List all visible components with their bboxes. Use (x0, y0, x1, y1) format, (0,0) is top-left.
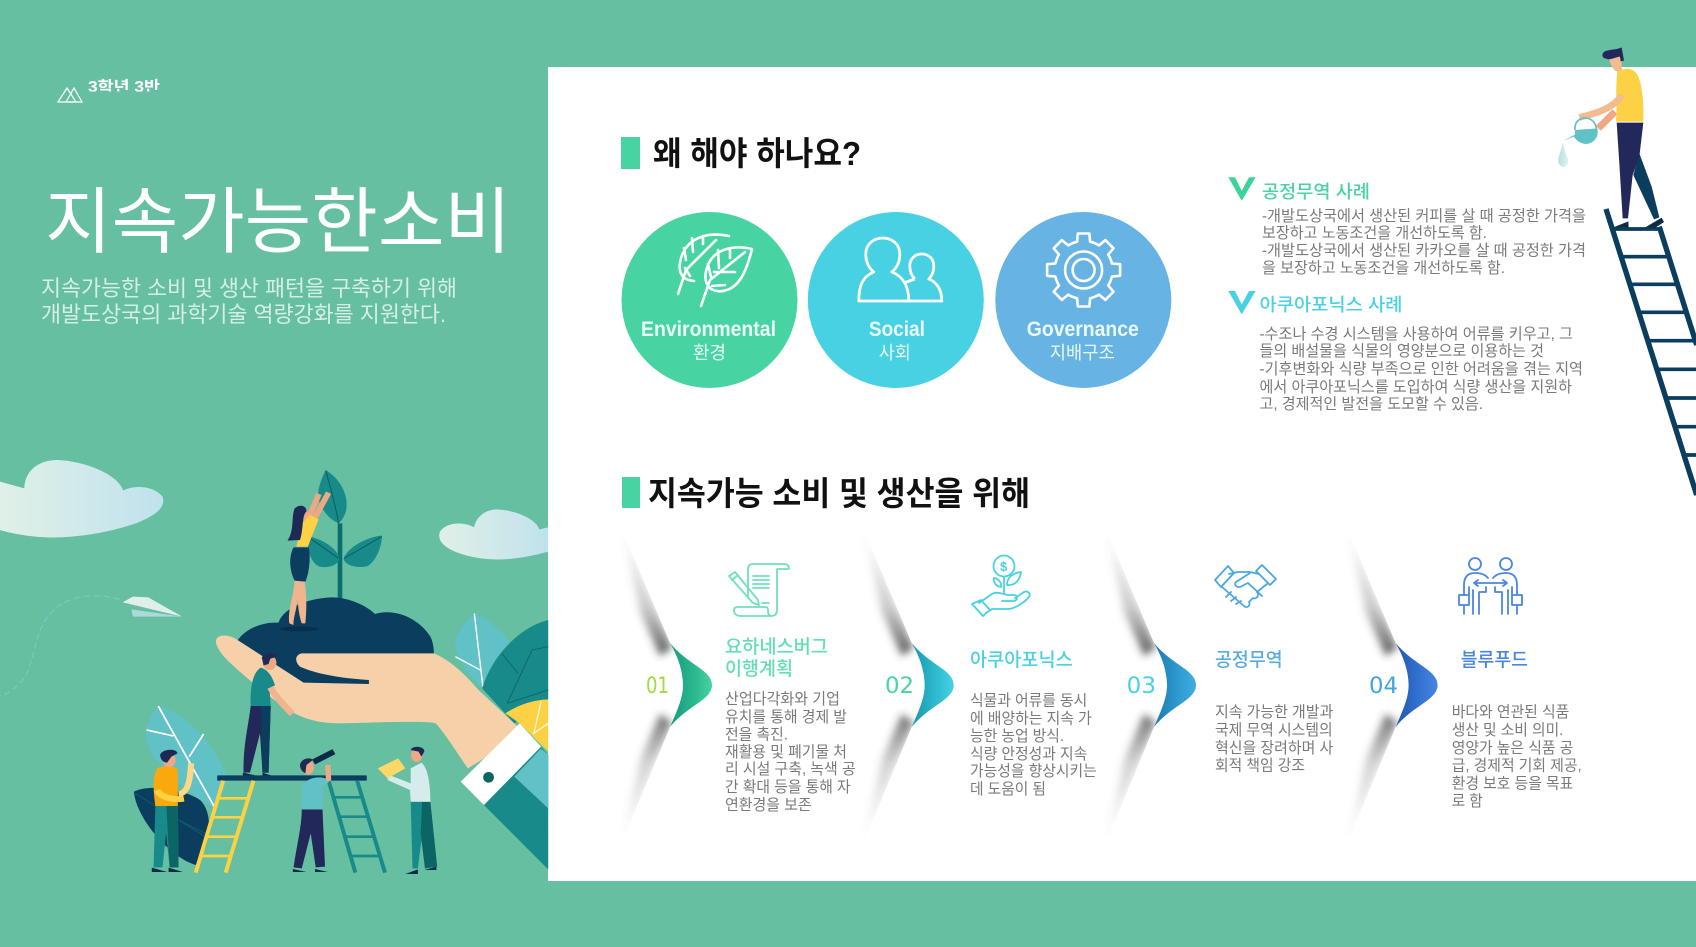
step text: 회적 책임 강조 (1215, 756, 1305, 774)
heading marker (622, 477, 640, 508)
standing man (243, 653, 292, 777)
paper plane (122, 597, 182, 617)
giant hand (216, 635, 525, 768)
number 03: 03 (1127, 674, 1156, 699)
step text: 환경 보호 등을 목표 (1452, 774, 1573, 792)
case text (1260, 325, 1583, 413)
heading marker (621, 137, 640, 169)
label: 사회: 사회 (879, 343, 911, 363)
icon: check V green (1228, 177, 1256, 201)
case text: -개발도상국에서 생산된 커피를 살 때 공정한 가격을 (1262, 207, 1586, 225)
icon: handshake (1215, 565, 1276, 607)
step text: 생산 및 소비 의미. (1452, 721, 1563, 739)
panel: white content area (548, 67, 1696, 881)
step 04 (1349, 532, 1582, 840)
step text: 데 도움이 됨 (970, 780, 1046, 798)
back leaves (455, 613, 548, 752)
step text: 국제 무역 시스템의 (1215, 721, 1333, 739)
number 01: 01 (646, 674, 669, 699)
step title: 아쿠아포닉스 (970, 649, 1073, 671)
man with binoculars (293, 752, 334, 872)
step text: 로 함 (1452, 792, 1483, 810)
step text: 식물과 어류를 동시 (970, 692, 1087, 710)
step title: 공정무역 (1215, 649, 1283, 671)
step 02 (865, 532, 1097, 840)
man (1579, 47, 1664, 228)
label: 지배구조: 지배구조 (1050, 343, 1115, 363)
step title: 요하네스버그 (725, 636, 828, 658)
case heading: 아쿠아포닉스 사례 (1260, 295, 1402, 315)
label: Governance: Governance (1027, 318, 1139, 341)
watering can (1563, 118, 1598, 144)
step text: 리 시설 구축, 녹색 공 (725, 760, 856, 778)
case block: aquaponics (1228, 291, 1583, 413)
platform (217, 775, 367, 781)
case text: -개발도상국에서 생산된 카카오를 살 때 공정한 가격 (1262, 242, 1586, 260)
title: 지속가능한소비 (45, 183, 511, 263)
step text: 바다와 연관된 식품 (1452, 703, 1569, 721)
step text: 간 확대 등을 통해 자 (725, 778, 851, 796)
icon: document (729, 564, 789, 616)
sleeve and cuff (461, 723, 548, 869)
case heading: 공정무역 사례 (1262, 182, 1370, 202)
illustration: man watering on ladder (1558, 47, 1696, 495)
label: Environmental: Environmental (641, 318, 776, 341)
woman on soil (280, 493, 329, 631)
step text: 산업다각화와 기업 (725, 690, 840, 708)
subtitle: 개발도상국의 과학기술 역량강화를 지원한다. (41, 302, 446, 327)
step text: 가능성을 향상시키는 (970, 762, 1097, 780)
step text: 재활용 및 폐기물 처 (725, 743, 847, 761)
step text: 식량 안정성과 지속 (970, 745, 1087, 763)
step title: 블루푸드 (1461, 649, 1528, 671)
subtitle: 지속가능한 소비 및 생산 패턴을 구축하기 위해 (41, 276, 457, 301)
case text: 들의 배설물을 식물의 영양분으로 이용하는 것 (1260, 342, 1544, 360)
step text (1215, 703, 1333, 774)
case block: fair trade (1228, 177, 1586, 277)
soil (236, 597, 434, 685)
ladder (1606, 209, 1696, 495)
step text: 에 배양하는 지속 가 (970, 710, 1092, 728)
case text: 에서 아쿠아포닉스를 도입하여 식량 생산을 지원하 (1260, 378, 1572, 396)
step title (725, 636, 828, 680)
circle: Governance (995, 212, 1171, 388)
case text: -수조나 수경 시스템을 사용하여 어류를 키우고, 그 (1260, 325, 1573, 343)
step title: 이행계획 (725, 658, 793, 680)
step text (725, 690, 856, 814)
step text: 지속 가능한 개발과 (1215, 703, 1333, 721)
step text: 영양가 높은 식품 공 (1452, 739, 1573, 757)
label: 환경: 환경 (693, 343, 726, 363)
section heading: why (621, 135, 861, 172)
teal ladder (329, 781, 385, 873)
cloud right (439, 509, 548, 559)
chevron 02 (865, 532, 967, 840)
illustration: hand, plant and people (0, 460, 548, 874)
circle: Environmental (622, 212, 798, 388)
subtitle (41, 276, 457, 327)
circle: Social (808, 212, 984, 388)
man with paper (378, 747, 437, 874)
step text: 능한 농업 방식. (970, 727, 1064, 745)
section heading: sustainable (622, 475, 1030, 512)
step 03 (1107, 532, 1333, 840)
paper plane path (0, 596, 120, 696)
heading text: 지속가능 소비 및 생산을 위해 (648, 475, 1030, 512)
man in orange shirt (152, 750, 191, 872)
icon: mountain logo (58, 88, 82, 102)
icon: two people (1459, 558, 1522, 614)
icon: leaves (678, 235, 752, 306)
chevron 01 (623, 532, 735, 840)
chevron 04 (1349, 532, 1451, 840)
step text: 전을 촉진. (725, 726, 788, 744)
case text: 을 보장하고 노동조건을 개선하도록 함. (1262, 259, 1505, 277)
icon: money plant (972, 556, 1030, 616)
step 01 (623, 532, 856, 840)
dollar sign: $ (1000, 559, 1008, 574)
heading text: 왜 해야 하나요? (653, 135, 861, 172)
icon: check V cyan (1228, 291, 1256, 314)
step text: 혁신을 장려하며 사 (1215, 739, 1333, 757)
case text: 보장하고 노동조건을 개선하도록 함. (1262, 224, 1487, 242)
water drop (1558, 143, 1568, 167)
chevron 03 (1107, 532, 1209, 840)
step text: 급, 경제적 기회 제공, (1452, 756, 1582, 774)
icon: people (859, 238, 942, 301)
left leaves (134, 706, 229, 865)
logo (58, 78, 160, 102)
case text: -기후변화와 식량 부족으로 인한 어려움을 겪는 지역 (1260, 360, 1583, 378)
step text: 유치를 통해 경제 발 (725, 708, 847, 726)
process steps (623, 532, 1582, 840)
case text: 고, 경제적인 발전을 도모할 수 있음. (1260, 395, 1483, 413)
yellow ladder (196, 781, 254, 873)
plant (307, 470, 382, 599)
case text (1262, 207, 1586, 277)
step text (1452, 703, 1582, 810)
logo text: 3학년 3반 (88, 78, 160, 96)
step text: 연환경을 보존 (725, 796, 812, 814)
ESG circles (622, 212, 1171, 388)
number 04: 04 (1369, 674, 1398, 699)
number 02: 02 (885, 674, 914, 699)
cloud left (0, 460, 163, 537)
icon: gear (1047, 234, 1120, 306)
label: Social: Social (869, 318, 925, 341)
step text (970, 692, 1097, 798)
